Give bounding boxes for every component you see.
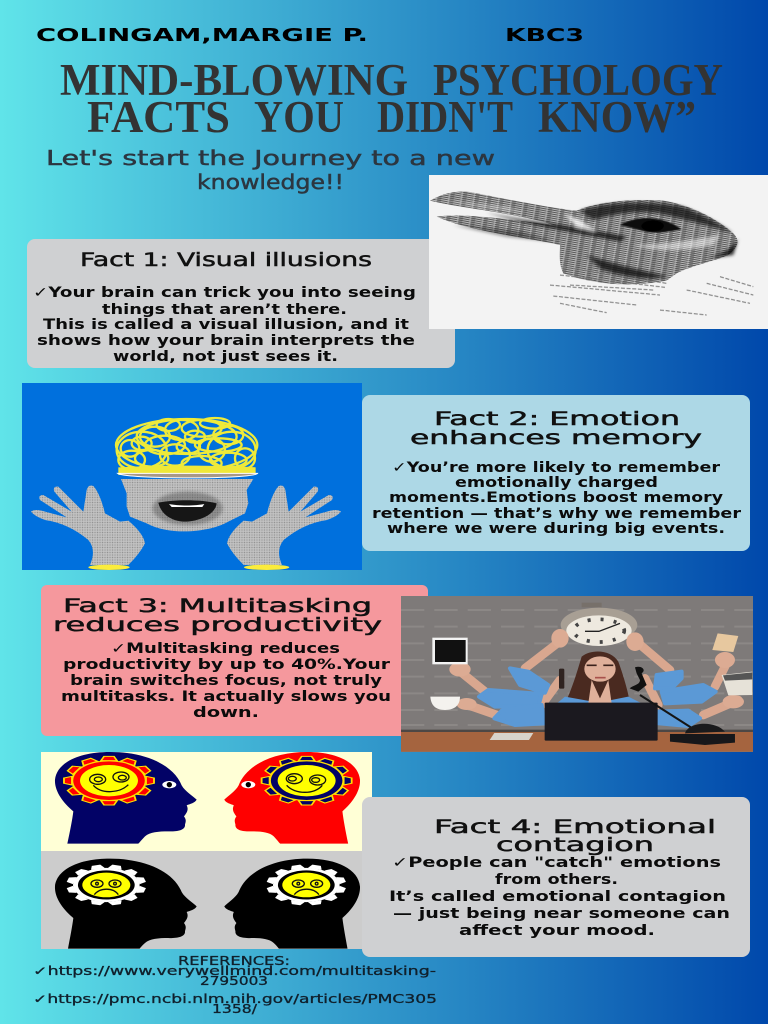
brick wall texture (401, 610, 753, 725)
fact 3 heading (53, 595, 382, 636)
banknotes (712, 633, 738, 652)
image: brain scribble face with hands (22, 383, 362, 570)
clock (561, 603, 637, 646)
references: REFERENCES: (178, 954, 290, 968)
fact 4 text: — just being near someone can (393, 906, 730, 922)
scribble brain (116, 418, 257, 471)
fact 3 text: down. (193, 705, 259, 721)
fact 4 heading (434, 816, 716, 856)
subtitle: Let's start the Journey to a new (46, 146, 495, 170)
fact 1 text: world, not just sees it. (113, 349, 338, 365)
title: FACTS (87, 92, 230, 142)
woman (555, 651, 645, 705)
calculator (722, 672, 752, 695)
sad head left (55, 859, 197, 949)
fact 2 text: ✓You’re more likely to remember (392, 460, 720, 476)
duck-rabbit silhouette (430, 192, 738, 284)
desk tablet (490, 733, 533, 740)
fact 3 text: ✓Multitasking reduces (111, 641, 340, 657)
face (121, 479, 253, 531)
fact 4 text: ✓People can "catch" emotions (392, 855, 721, 871)
neck hatching (550, 267, 753, 315)
tablet (432, 638, 468, 664)
fact 4 text: from others. (495, 872, 618, 888)
shading (440, 200, 738, 278)
fact 2 heading: Fact 2: Emotion (434, 408, 680, 430)
handheld phones (559, 667, 647, 692)
fact 2 heading: enhances memory (410, 427, 702, 449)
arms (458, 640, 738, 715)
fact 3 text: multitasks. It actually slows you (61, 689, 391, 705)
brow rim (118, 473, 258, 478)
desk telephone (640, 695, 735, 745)
fact 3 text (61, 641, 391, 721)
sad head right (224, 859, 360, 949)
fact 3 heading: reduces productivity (53, 614, 382, 636)
fact 3 text: productivity by up to 40%.Your (63, 657, 390, 673)
fact 3 heading: Fact 3: Multitasking (63, 595, 372, 617)
panel: fact 4 card (362, 797, 750, 957)
happy head blue (55, 752, 197, 844)
fact 1 text: things that aren’t there. (102, 302, 347, 318)
fact 4 heading: contagion (496, 834, 654, 856)
mouth shadow (153, 492, 223, 525)
happy head red (224, 752, 360, 844)
fact 2 text (372, 460, 741, 537)
panel: fact 2 card (362, 395, 750, 551)
fact 2 text: where we were during big events. (387, 521, 725, 537)
desk (401, 732, 753, 752)
image: duck-rabbit illusion (429, 175, 768, 329)
blue sleeves (479, 668, 716, 726)
laptop (545, 703, 658, 741)
title (60, 55, 723, 142)
fact 2 text: moments.Emotions boost memory (389, 490, 723, 506)
right hand (227, 485, 341, 565)
title: KNOW” (538, 92, 696, 142)
fact 1 text: shows how your brain interprets the (37, 333, 415, 349)
fact 4 heading: Fact 4: Emotional (434, 816, 716, 838)
coffee cup (430, 697, 460, 710)
references: ✓https://www.verywellmind.com/multitasking- (33, 964, 436, 978)
fact 3 text: brain switches focus, not truly (70, 673, 382, 689)
fact 1 text: ✓Your brain can trick you into seeing (33, 285, 416, 301)
eye (620, 218, 682, 233)
fact 1 text (33, 285, 416, 365)
fact 4 text: affect your mood. (459, 923, 655, 939)
panel: fact 1 card (27, 239, 455, 368)
author header: KBC3 (505, 25, 584, 46)
references: ✓https://pmc.ncbi.nlm.nih.gov/articles/PMC305 (33, 992, 437, 1006)
fact 1 text: This is called a visual illusion, and it (43, 317, 409, 333)
references: 1358/ (212, 1002, 258, 1016)
panel: fact 3 card (41, 585, 428, 736)
author header: COLINGAM,MARGIE P. (36, 25, 368, 46)
left hand (31, 485, 145, 565)
references: 2795003 (200, 974, 268, 988)
title: DIDN'T (377, 92, 513, 142)
title: MIND-BLOWING (60, 55, 408, 105)
author header (36, 25, 584, 46)
references (33, 954, 437, 1016)
subtitle: knowledge!! (197, 170, 344, 194)
subtitle (46, 146, 495, 194)
fact 4 text: It’s called emotional contagion (389, 889, 726, 905)
fact 4 text (389, 855, 730, 939)
fact 1 heading: Fact 1: Visual illusions (80, 249, 372, 271)
fact 2 heading (410, 408, 702, 449)
right wrist (244, 565, 289, 570)
fact 2 text: emotionally charged (455, 475, 658, 491)
left wrist (88, 565, 130, 570)
title: PSYCHOLOGY (433, 55, 723, 105)
mouth (158, 500, 217, 522)
title: YOU (254, 92, 344, 142)
image: emotional contagion heads (41, 752, 372, 949)
fact 2 text: retention — that’s why we remember (372, 506, 741, 522)
hands (449, 629, 744, 710)
image: multitasking woman at desk (401, 596, 753, 752)
